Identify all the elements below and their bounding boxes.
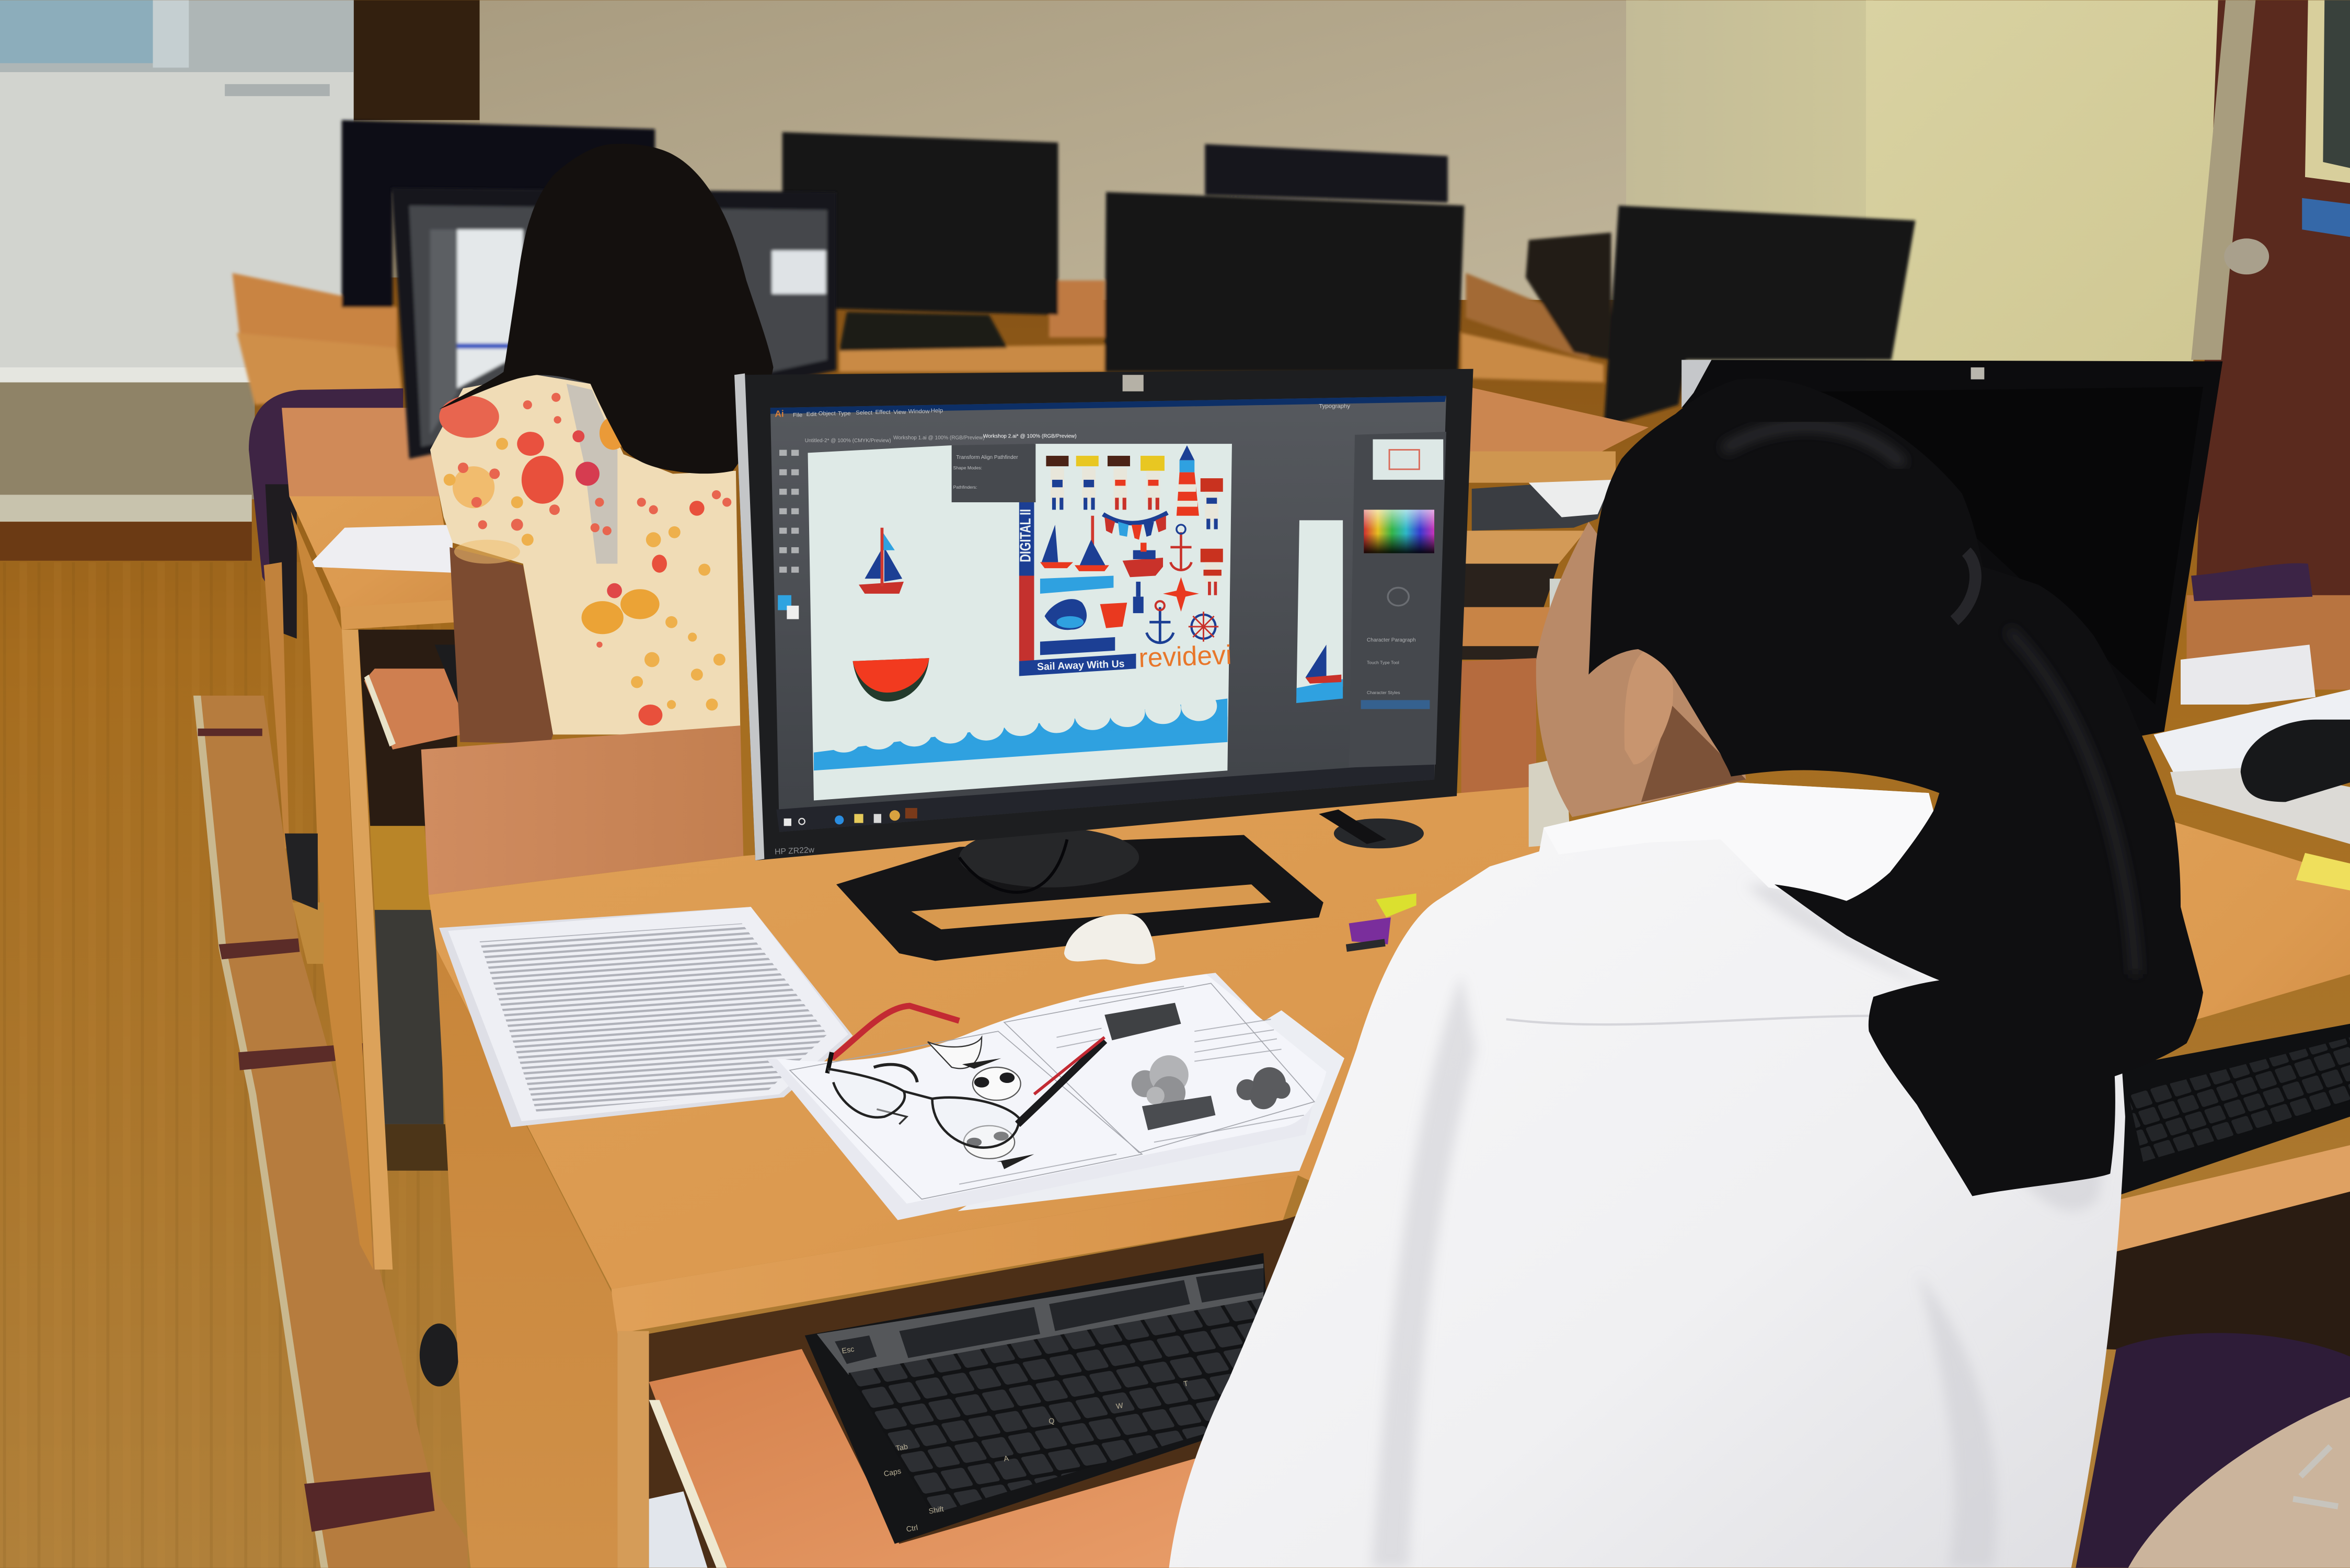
key labels	[841, 1345, 1189, 1534]
seated woman: hair and ponytail	[1588, 378, 2203, 1196]
desk partition panel	[421, 725, 743, 895]
key labels: Ctrl	[906, 1524, 918, 1534]
water bottle behind woman	[1529, 579, 1569, 847]
key labels: Q	[1048, 1417, 1055, 1426]
key labels: Shift	[928, 1505, 944, 1516]
menu bar: Select	[856, 410, 873, 416]
left row desk and purple chair	[249, 388, 462, 1387]
windows taskbar icons	[784, 808, 917, 826]
key labels: A	[1003, 1454, 1010, 1463]
menu bar: Window	[908, 408, 930, 414]
poster icons: waves, whale, bucket, shovel	[1040, 575, 1144, 655]
interface screenshots	[1104, 1003, 1215, 1130]
tray white edge	[649, 1400, 727, 1568]
pathfinder panel: Pathfinders:	[953, 485, 977, 490]
keyboard tray	[649, 1349, 1222, 1568]
main monitor	[734, 369, 1473, 860]
back row monitors and desks	[232, 120, 1915, 428]
markers and stationery on desk	[1346, 893, 1416, 952]
poster sidebar with title: DIGITAL II	[1017, 509, 1034, 562]
door with frame, knob and sign	[2191, 0, 2350, 599]
shirt yoke seam	[1506, 1016, 1933, 1024]
menu bar: Object	[819, 411, 836, 417]
menu bar: View	[893, 409, 906, 416]
tool column	[778, 450, 799, 619]
artboard	[808, 444, 1232, 801]
pathfinder panel: Shape Modes:	[953, 465, 982, 470]
pathfinder panel: Transform Align Pathfinder	[956, 455, 1018, 460]
under desk cavity	[648, 1199, 1349, 1568]
hp logo	[1123, 375, 1144, 391]
right side panels: Touch Type Tool	[1367, 660, 1399, 665]
large flowers	[439, 396, 705, 725]
printed document on desk	[439, 907, 853, 1127]
key labels: T	[1183, 1379, 1189, 1389]
key labels: Caps	[883, 1467, 902, 1479]
poster icons: sailors	[1046, 456, 1223, 595]
poster banner: Sail Away With Us	[1037, 658, 1125, 673]
main desk	[421, 725, 1588, 1568]
right side panels: Character Styles	[1367, 690, 1400, 695]
right side panels	[1349, 432, 1446, 767]
ear	[1625, 648, 1673, 765]
seated woman: white shirt	[1169, 782, 2125, 1568]
menu bar: Ai	[775, 408, 784, 419]
poster logotype: revidevi	[1138, 639, 1232, 673]
page frames	[790, 1031, 1142, 1199]
menu bar: File	[793, 412, 802, 418]
menu bar: Help	[931, 408, 943, 414]
poster banner	[1019, 654, 1136, 676]
right desk with papers, mouse and keyboard	[2098, 563, 2350, 1356]
menu bar: Effect	[876, 409, 891, 416]
model label: HP ZR22w	[775, 846, 815, 857]
pasteboard artboard on right	[1296, 520, 1343, 703]
tab row: Untitled-2* @ 100% (CMYK/Preview)	[805, 438, 891, 444]
tab row: Workshop 2.ai* @ 100% (RGB/Preview)	[983, 434, 1077, 440]
key labels: Esc	[841, 1345, 855, 1356]
desk leg front	[617, 1331, 649, 1568]
menu bar	[775, 403, 1350, 419]
bag chain	[2293, 1446, 2338, 1506]
desk behind main monitor, right	[1461, 385, 1649, 794]
key labels: Tab	[895, 1443, 908, 1453]
menu bar: Typography	[1319, 403, 1350, 409]
large dark monitor, right	[1681, 360, 2222, 750]
watermelon slice	[853, 658, 929, 701]
desk left side	[436, 949, 617, 1568]
open workbook with pandas and shapes	[766, 973, 1344, 1220]
tab row: Workshop 1.ai @ 100% (RGB/Preview)	[893, 435, 985, 441]
small flowers	[458, 393, 731, 648]
poster icons: boats and ship	[1040, 516, 1163, 577]
pathfinder panel	[952, 444, 1035, 502]
eyeglasses	[827, 1006, 1104, 1148]
sheet under book	[958, 1010, 1344, 1211]
tab row	[805, 434, 1077, 444]
hair tie	[1954, 552, 1975, 620]
poster icons: bunting	[1103, 513, 1168, 540]
long wooden step	[193, 696, 468, 1568]
panda drawings	[874, 1037, 1034, 1169]
book text lines	[959, 986, 1304, 1184]
monitor behind left woman	[391, 188, 836, 459]
left woman: hair	[439, 144, 774, 474]
collar	[1543, 782, 1941, 917]
poster sidebar with title	[1017, 502, 1034, 661]
desk front edge	[612, 1175, 1298, 1334]
gray fabric band	[567, 384, 617, 563]
right side panels: Character Paragraph	[1367, 638, 1416, 643]
main monitor stand	[836, 810, 1424, 961]
keyboard, front	[805, 1253, 1274, 1544]
screen interface	[770, 396, 1446, 832]
crumpled tissue	[1064, 914, 1156, 964]
scalloped waves	[814, 691, 1227, 770]
poster icons: anchors, compass and wheel	[1147, 525, 1218, 643]
book pages	[766, 973, 1319, 1220]
projection screen	[0, 0, 354, 383]
shirt fold shadows	[1372, 884, 2113, 1568]
poster icons: lighthouse	[1177, 445, 1199, 516]
menu bar: Edit	[807, 411, 817, 418]
menu bar: Type	[838, 411, 851, 417]
purple chair and beige bag	[2076, 1333, 2350, 1568]
seated woman: face and neck	[1536, 522, 1746, 817]
desk top surface	[429, 787, 1588, 1289]
left woman: arm and blouse	[430, 375, 740, 744]
sailboat	[859, 528, 904, 594]
key labels: W	[1115, 1401, 1124, 1411]
gray overlapping circles	[1132, 1055, 1291, 1109]
